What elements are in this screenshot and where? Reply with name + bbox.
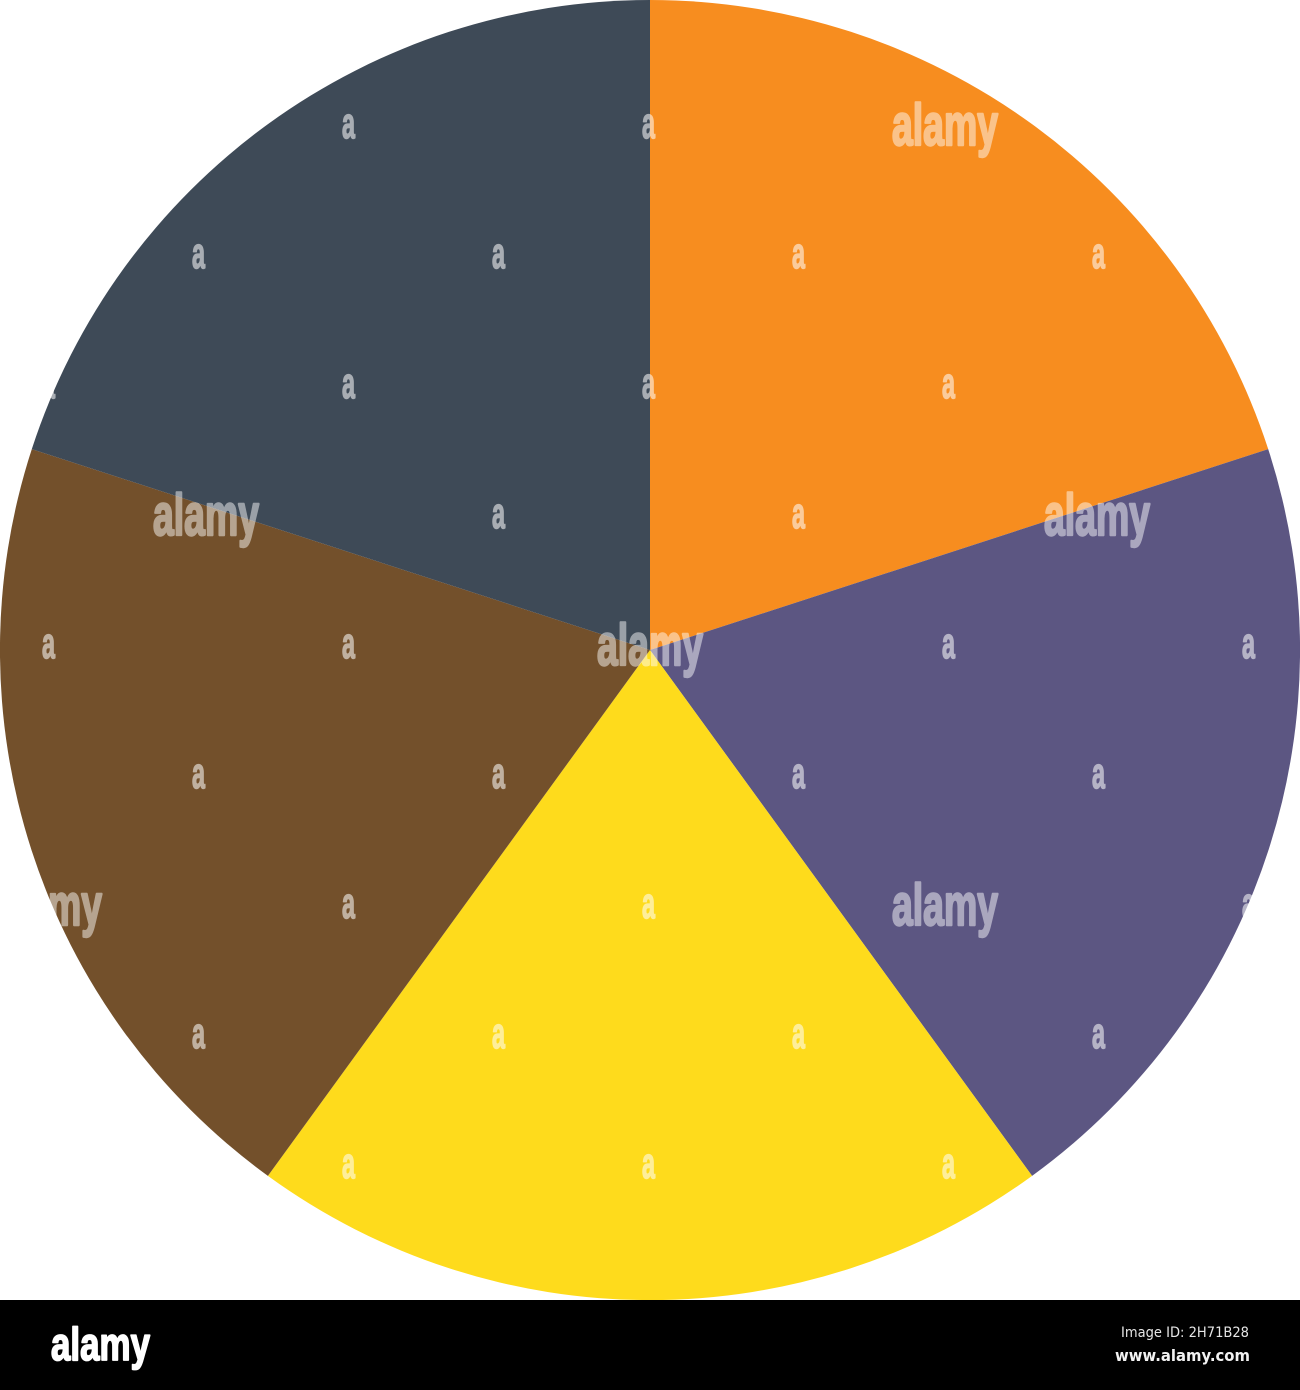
watermark: small repeated letters: a xyxy=(342,99,355,148)
watermark: small repeated letters: a xyxy=(792,229,805,278)
watermark: small repeated letters: a xyxy=(342,1139,355,1188)
watermark: small repeated letters: a xyxy=(1092,1009,1105,1058)
watermark: small repeated letters xyxy=(42,99,1255,1188)
footer image id: Image ID: 2H71B28 xyxy=(1121,1325,1249,1341)
watermark: small repeated letters: a xyxy=(942,1139,955,1188)
footer bar xyxy=(0,1300,1300,1390)
footer logo: alamy xyxy=(51,1318,150,1370)
watermark: small repeated letters: a xyxy=(492,229,505,278)
watermark: small repeated letters: a xyxy=(42,359,55,408)
watermark: small repeated letters: a xyxy=(1092,749,1105,798)
watermark: large alamy marks: alamy xyxy=(1044,483,1150,548)
watermark: small repeated letters: a xyxy=(1242,619,1255,668)
watermark: small repeated letters: a xyxy=(642,1139,655,1188)
watermark: small repeated letters: a xyxy=(42,619,55,668)
watermark: small repeated letters: a xyxy=(342,359,355,408)
watermark: small repeated letters: a xyxy=(192,1009,205,1058)
watermark: large alamy marks: alamy xyxy=(892,93,998,158)
slice: yellow xyxy=(268,650,1032,1300)
watermark: small repeated letters: a xyxy=(342,619,355,668)
watermark: large alamy marks: alamy xyxy=(892,873,998,938)
watermark: large alamy marks: alamy xyxy=(153,483,259,548)
watermark: small repeated letters: a xyxy=(642,99,655,148)
watermark: small repeated letters: a xyxy=(342,879,355,928)
watermark: small repeated letters: a xyxy=(492,749,505,798)
watermark: small repeated letters: a xyxy=(642,879,655,928)
watermark: large alamy marks: alamy xyxy=(0,873,102,938)
slice: purple xyxy=(650,449,1300,1176)
watermark: small repeated letters: a xyxy=(192,749,205,798)
watermark: small repeated letters: a xyxy=(942,619,955,668)
watermark: small repeated letters: a xyxy=(192,229,205,278)
watermark: large alamy marks: alamy xyxy=(597,613,703,678)
slice: navy xyxy=(32,0,650,650)
watermark: small repeated letters: a xyxy=(492,1009,505,1058)
footer website: www.alamy.com xyxy=(1115,1346,1250,1365)
watermark: small repeated letters: a xyxy=(1092,229,1105,278)
watermark: small repeated letters: a xyxy=(492,489,505,538)
watermark: small repeated letters: a xyxy=(942,359,955,408)
watermark: small repeated letters: a xyxy=(792,749,805,798)
watermark: small repeated letters: a xyxy=(642,359,655,408)
slice: brown xyxy=(0,449,650,1176)
slice: orange xyxy=(650,0,1268,650)
watermark: small repeated letters: a xyxy=(792,489,805,538)
watermark: small repeated letters: a xyxy=(1242,879,1255,928)
watermark: small repeated letters: a xyxy=(792,1009,805,1058)
watermark: large alamy marks xyxy=(0,93,1150,938)
